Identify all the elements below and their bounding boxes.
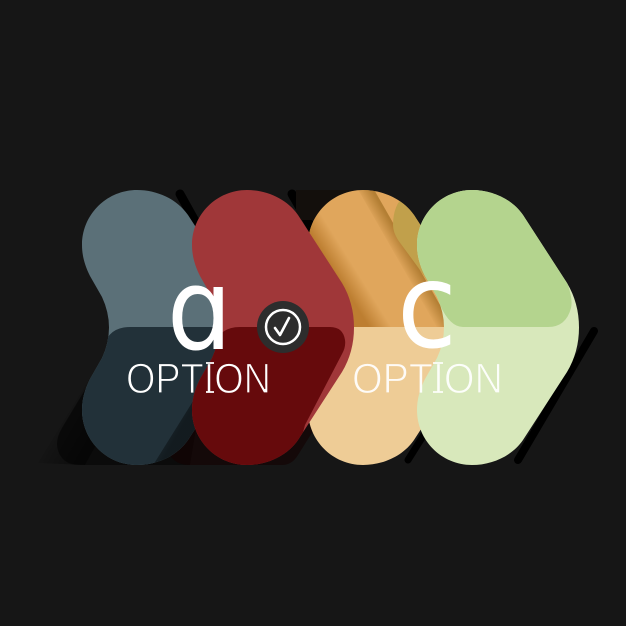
label: option right bbox=[354, 362, 500, 393]
infographic bbox=[57, 190, 598, 465]
label: option left bbox=[128, 362, 268, 393]
icon: check badge bbox=[257, 301, 309, 353]
fold shadow bbox=[360, 190, 444, 327]
drop shadows bbox=[38, 190, 594, 465]
chevron: red bbox=[192, 190, 354, 465]
shadow from red chevron bbox=[309, 215, 387, 327]
chevron: blue bbox=[82, 190, 216, 465]
olive shadow from green chevron bbox=[393, 201, 428, 282]
letter a: ɑ bbox=[167, 244, 232, 376]
chevron: orange bbox=[309, 190, 444, 465]
letter c: c bbox=[397, 237, 457, 375]
chevron: green bbox=[417, 190, 579, 465]
